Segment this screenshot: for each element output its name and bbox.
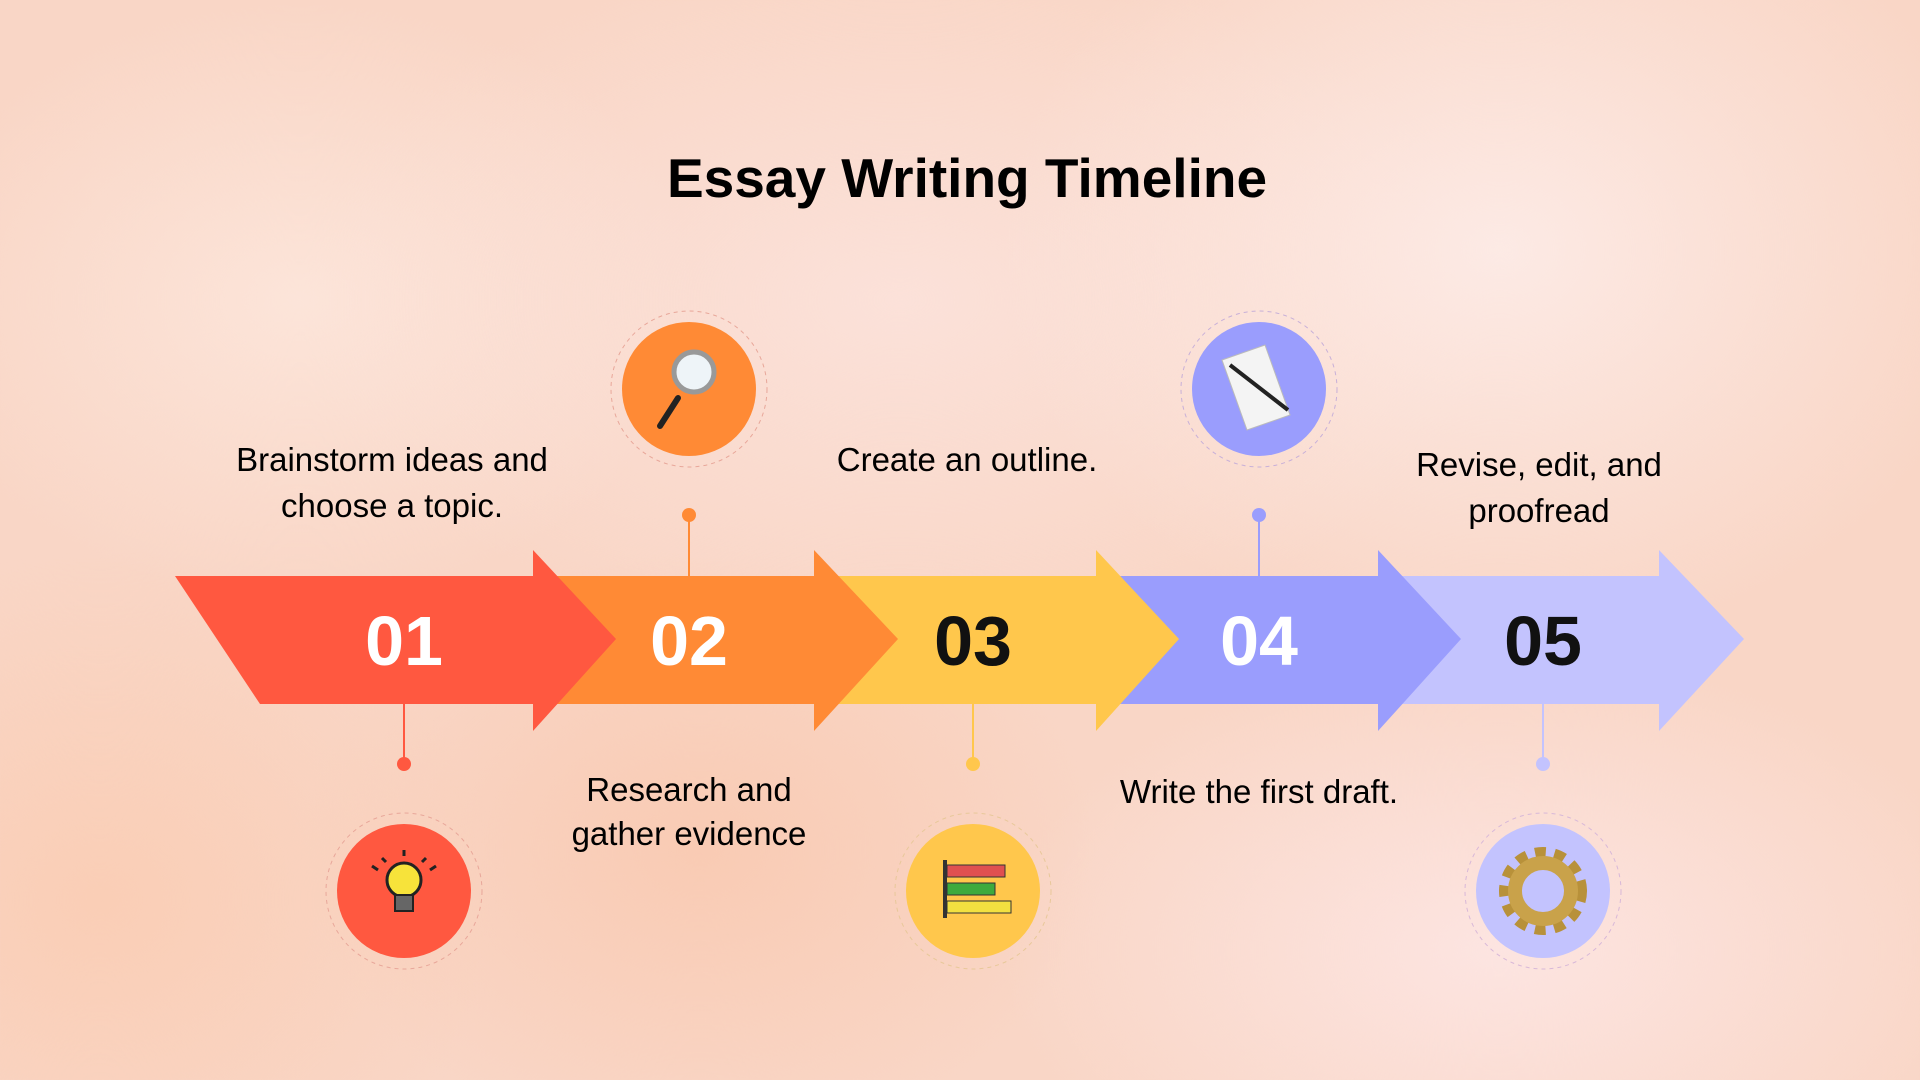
text: step 01: choose a topic. xyxy=(281,487,503,524)
arrow 02 xyxy=(533,550,898,731)
icon: bar chart xyxy=(895,813,1051,969)
connector 01 xyxy=(397,704,411,771)
text: step 04: Write the first draft. xyxy=(1120,773,1398,810)
text: step 02: gather evidence xyxy=(572,815,806,852)
connector 03 xyxy=(966,704,980,771)
text: step 02: Research and xyxy=(586,771,792,808)
text: step 05 xyxy=(1416,446,1662,529)
arrow 03 xyxy=(814,550,1179,731)
connector 05 xyxy=(1536,704,1550,771)
arrow 03: 03 xyxy=(934,602,1012,680)
arrow 02: 02 xyxy=(650,602,728,680)
icon: notepad xyxy=(1181,311,1337,467)
arrow 05 xyxy=(1378,550,1744,731)
text: step 02 xyxy=(572,771,806,852)
icon: gear xyxy=(1465,813,1621,969)
connector 04 xyxy=(1252,508,1266,576)
icon: light bulb xyxy=(326,813,482,969)
connector 02 xyxy=(682,508,696,576)
arrow 01: 01 xyxy=(365,602,443,680)
text: step 03: Create an outline. xyxy=(837,441,1097,478)
title: Essay Writing Timeline xyxy=(667,147,1267,209)
icon: magnifier xyxy=(611,311,767,467)
text: step 01: Brainstorm ideas and xyxy=(236,441,548,478)
arrow 04: 04 xyxy=(1220,602,1298,680)
arrow 05: 05 xyxy=(1504,602,1582,680)
text: step 05: Revise, edit, and xyxy=(1416,446,1662,483)
text: step 01 xyxy=(236,441,548,524)
text: step 05: proofread xyxy=(1468,492,1610,529)
arrow 01 xyxy=(175,550,616,731)
arrow 04 xyxy=(1096,550,1461,731)
